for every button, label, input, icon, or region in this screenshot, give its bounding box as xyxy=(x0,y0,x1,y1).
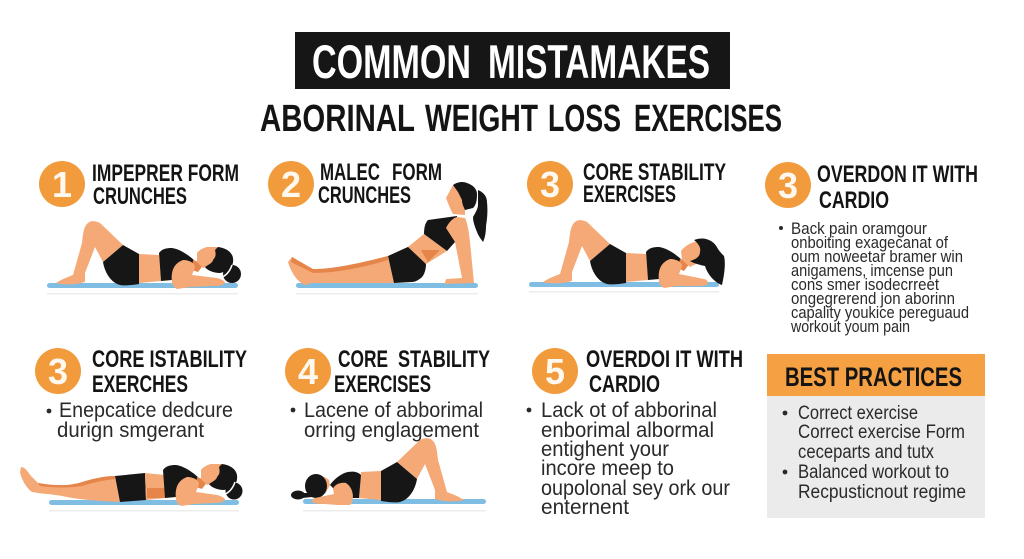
bullet text: Back pain oramgour xyxy=(791,220,927,238)
number badge 3: 3 xyxy=(540,164,560,205)
heading 2: FORM xyxy=(392,159,442,186)
heading 5: OVERDOI IT WITH xyxy=(586,346,743,373)
best practices list: Recpusticnout regime xyxy=(798,482,966,503)
subtitle: EXERCISES xyxy=(634,98,782,140)
bullet text: durign smgerant xyxy=(57,419,204,442)
panel: best practices xyxy=(767,354,985,518)
bullet text: orring englagement xyxy=(304,419,479,442)
bullet text: entighent your xyxy=(541,438,669,461)
bullet text: cons smer isodecrreet xyxy=(791,276,939,294)
best practices header xyxy=(767,354,985,396)
illustration: woman doing crunch, knees bent xyxy=(47,221,241,294)
heading 5: CARDIO xyxy=(589,371,660,398)
panel: core stability bottom middle xyxy=(285,346,490,512)
bullet text: Lack ot of abborinal xyxy=(541,399,717,422)
best practices header: BEST PRACTICES xyxy=(785,362,962,392)
best practices list: Correct exercise xyxy=(798,403,918,424)
heading 3: CORE STABILITY xyxy=(583,159,726,186)
number badge 5: 5 xyxy=(545,351,565,392)
bullet text: capality youkice pereguaud xyxy=(791,304,969,322)
heading 4: CORE xyxy=(338,346,388,373)
heading 1: IMPEPRER FORM xyxy=(92,160,239,187)
number badge 1 xyxy=(39,161,85,207)
subtitle: ABORINAL xyxy=(260,98,415,140)
bullet text: Lacene of abborimal xyxy=(304,399,483,422)
number badge xyxy=(765,162,811,208)
bullet text: incore meep to xyxy=(541,457,674,480)
best practices list: Balanced workout to xyxy=(798,462,949,483)
number badge 4 xyxy=(285,348,331,394)
heading 2: CRUNCHES xyxy=(318,182,411,209)
number badge 5 xyxy=(532,348,578,394)
bullet text: workout youm pain xyxy=(790,318,910,336)
number badge 4: 4 xyxy=(298,351,318,392)
heading xyxy=(817,161,978,214)
subtitle xyxy=(260,98,782,140)
best practices list xyxy=(783,403,966,503)
heading 4: EXERCISES xyxy=(334,371,431,398)
illustration: woman lying mirrored with knees bent xyxy=(291,438,486,512)
bullet text xyxy=(779,220,969,336)
bullet text: enborimal albormal xyxy=(541,419,714,442)
title banner xyxy=(295,32,730,89)
panel: mistake 1 xyxy=(39,160,241,294)
title banner: COMMON xyxy=(312,35,471,88)
number badge 3 xyxy=(527,161,573,207)
bullet text: anigamens, imcense pun xyxy=(791,262,953,280)
panel: mistake 3 top xyxy=(527,159,726,292)
number badge 2 xyxy=(268,161,314,207)
heading: EXERCHES xyxy=(92,371,188,398)
heading 4: STABILITY xyxy=(398,346,490,373)
bullet text xyxy=(291,399,483,442)
title banner: MISTAMAKES xyxy=(488,35,710,88)
subtitle: WEIGHT xyxy=(425,98,538,140)
bullet text xyxy=(47,399,233,442)
illustration: woman leaning back on arms, legs straight xyxy=(288,182,487,294)
heading 3: EXERCISES xyxy=(583,181,676,208)
panel: mistake 2 xyxy=(268,159,487,294)
heading 1: CRUNCHES xyxy=(93,183,187,210)
heading 2 xyxy=(318,159,442,209)
panel: core instability bottom left xyxy=(20,346,247,512)
number badge xyxy=(35,348,81,394)
illustration: woman lying flat with legs extended xyxy=(20,464,242,512)
heading 2: MALEC xyxy=(320,159,380,186)
heading 4 xyxy=(334,346,490,398)
bullet text xyxy=(527,399,730,519)
heading xyxy=(92,346,247,398)
heading 3 xyxy=(583,159,726,208)
heading: CARDIO xyxy=(819,187,889,214)
heading 5 xyxy=(586,346,743,398)
bullet text: onboiting exagecanat of xyxy=(791,234,948,252)
heading: CORE ISTABILITY xyxy=(92,346,247,373)
best practices list: ceceparts and tutx xyxy=(798,442,934,463)
best practices list: Correct exercise Form xyxy=(798,422,965,443)
heading 1 xyxy=(92,160,239,210)
panel: mistake overdoing cardio top xyxy=(765,161,978,336)
bullet text: enternent xyxy=(541,496,629,519)
subtitle: LOSS xyxy=(548,98,621,140)
bullet text: ongegrerend jon aborinn xyxy=(791,290,955,308)
number badge: 3 xyxy=(48,351,68,392)
number badge: 3 xyxy=(778,165,798,206)
panel: overdoing cardio bottom xyxy=(527,346,743,519)
bullet text: oum noweetar bramer win xyxy=(791,248,963,266)
bullet text: oupolonal sey ork our xyxy=(541,477,730,500)
number badge 1: 1 xyxy=(52,164,72,205)
bullet text: Enepcatice dedcure xyxy=(59,399,233,422)
number badge 2: 2 xyxy=(281,164,301,205)
illustration: woman lying with knees bent and ponytail xyxy=(529,220,725,292)
